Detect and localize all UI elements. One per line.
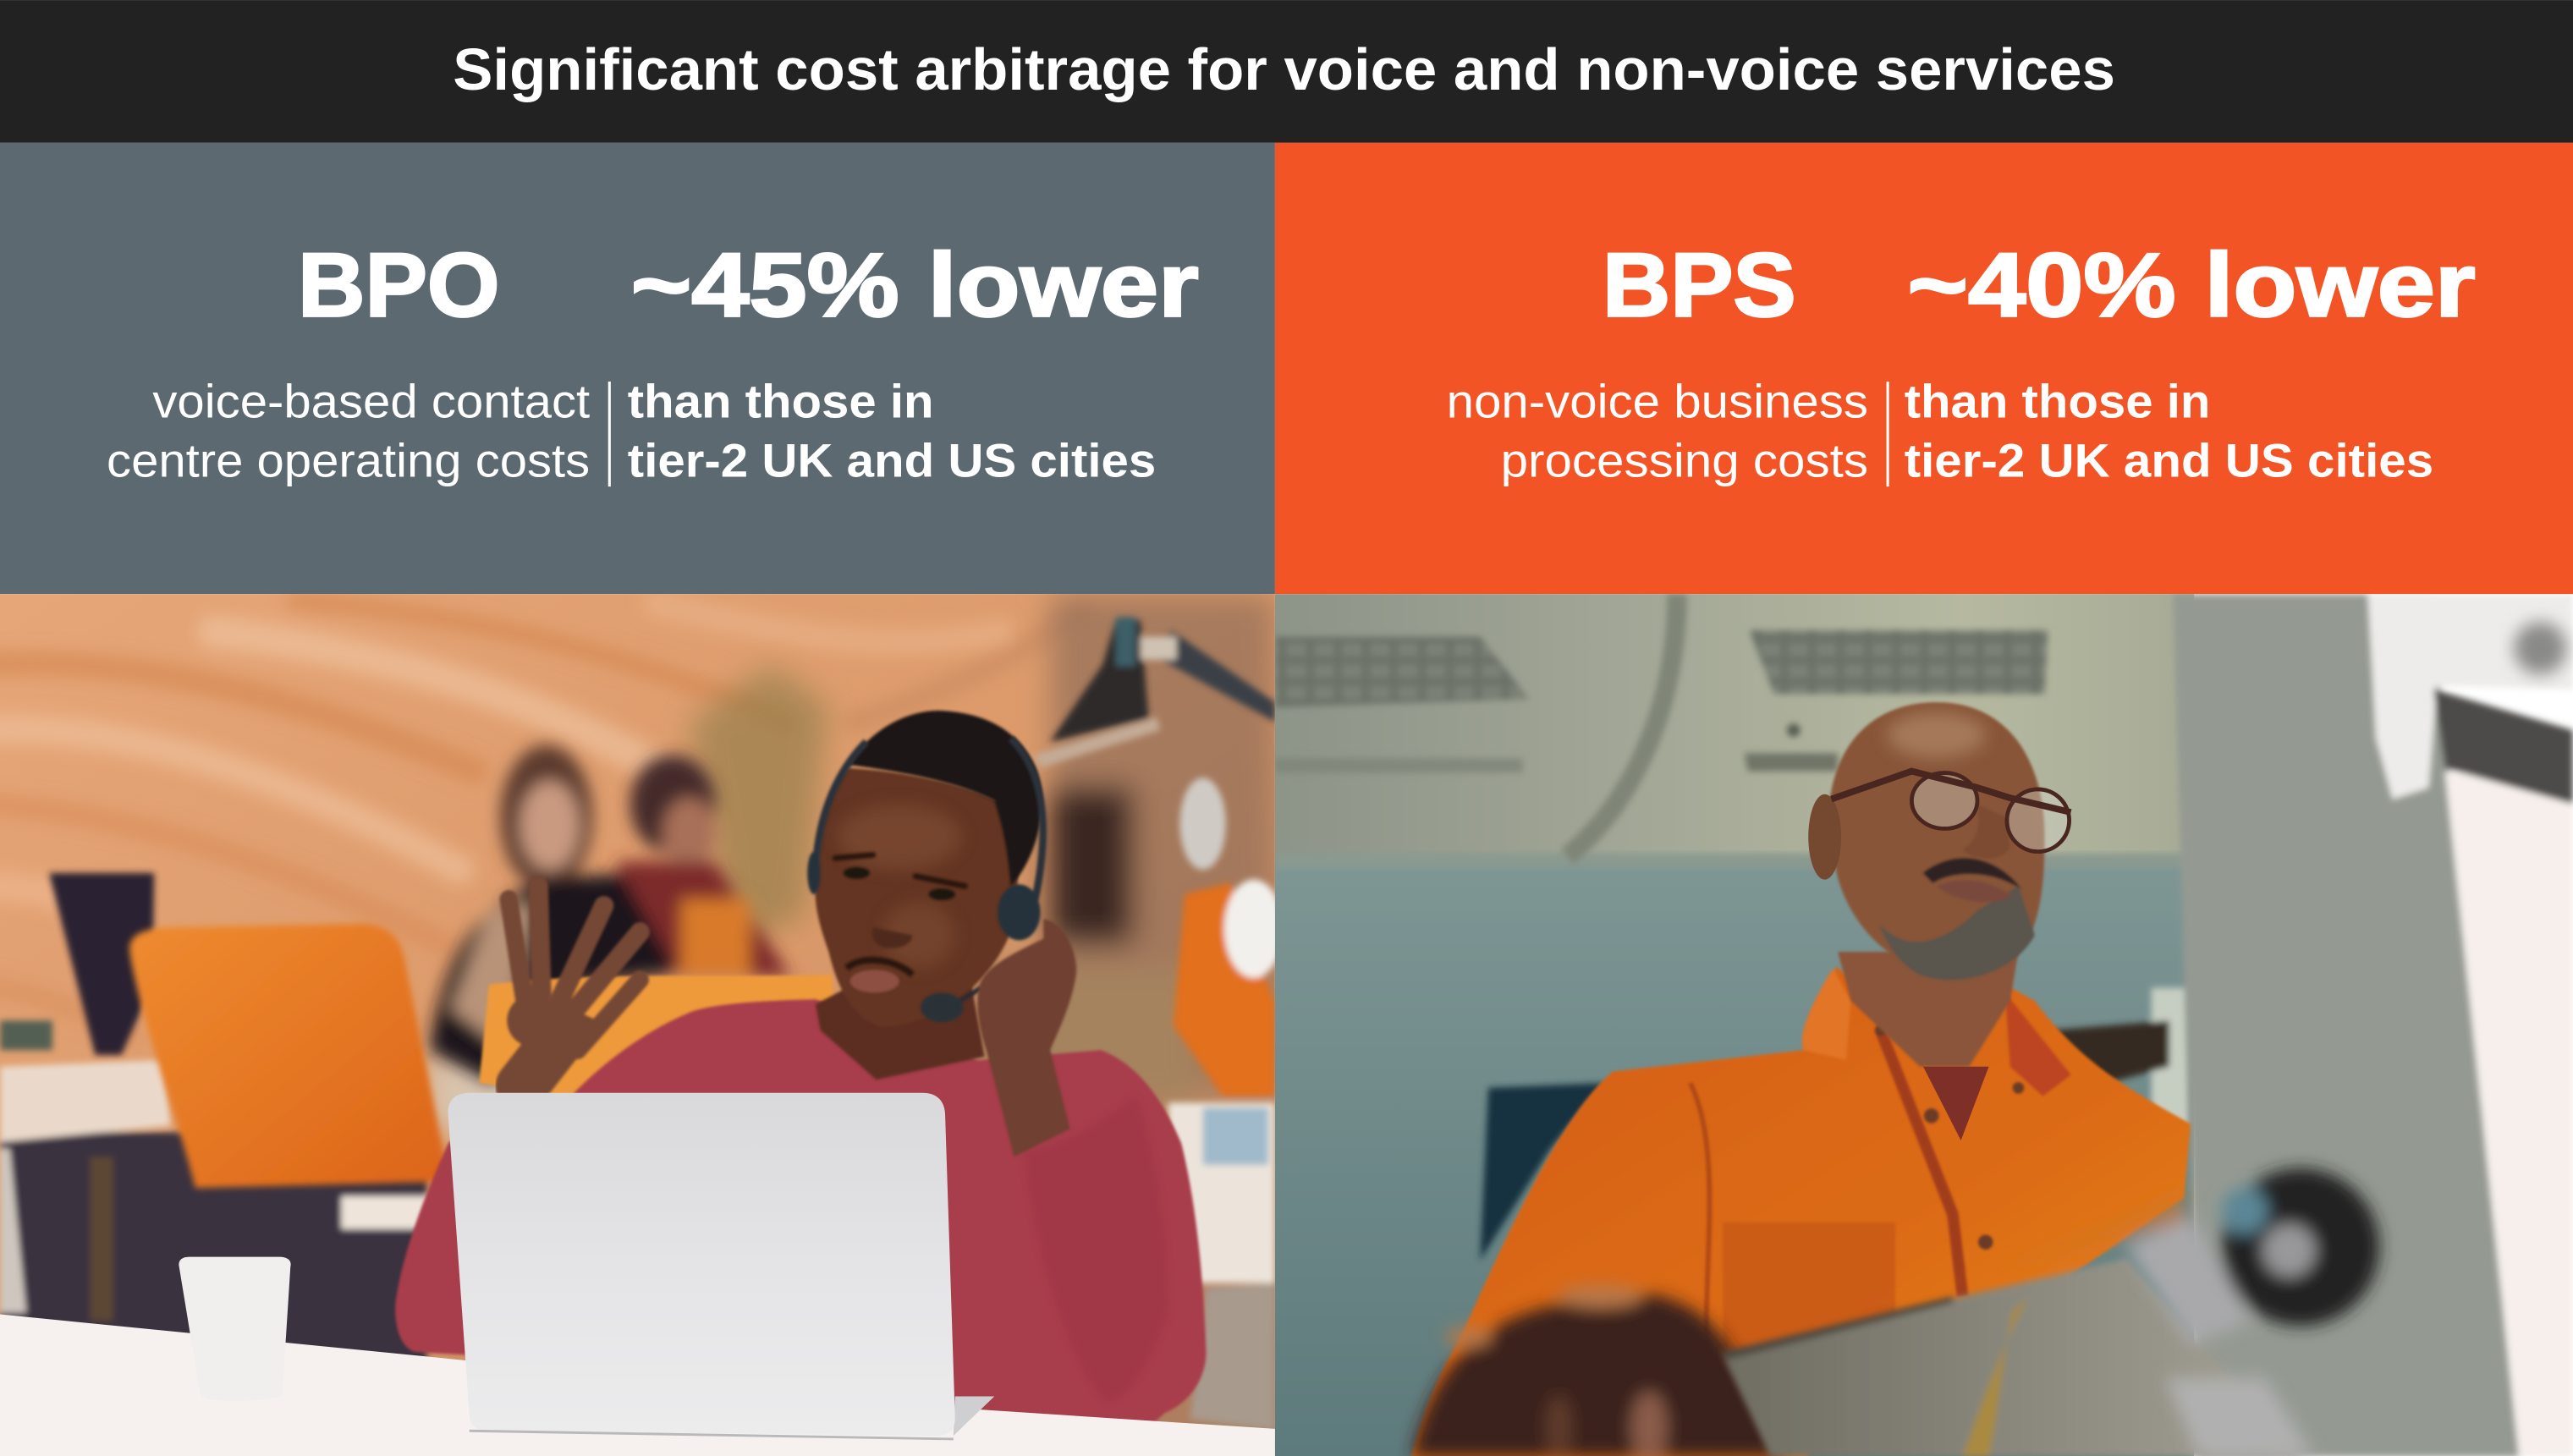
panel: BPO xyxy=(0,143,1275,594)
table xyxy=(0,1315,1280,1456)
text: BPO comparison: tier-2 UK and US cities xyxy=(628,434,1156,486)
agent hair xyxy=(849,711,1042,886)
text: non-voice description: non-voice business xyxy=(1447,376,1868,428)
title: Significant cost arbitrage for voice and non-voice services xyxy=(453,36,2115,102)
divider: BPS xyxy=(1887,382,1889,486)
text: BPO comparison xyxy=(628,376,1156,486)
agent head xyxy=(814,766,1020,992)
stat: ~40% lower: ~40% lower xyxy=(1908,234,2476,335)
foreground knob xyxy=(1838,1168,2379,1456)
text: BPS comparison: than those in xyxy=(1905,376,2210,428)
text: BPS comparison xyxy=(1905,376,2433,486)
heading: BPS: BPS xyxy=(1603,234,1796,335)
photo: smiling man with glasses at laptop xyxy=(1275,594,2573,1456)
agent raised hand xyxy=(509,886,640,1086)
back shelf objects xyxy=(2048,988,2191,1127)
background colleagues xyxy=(430,745,791,1083)
text: BPO comparison: than those in xyxy=(628,376,934,428)
back wall xyxy=(1275,861,2194,1456)
desk lamp xyxy=(1034,617,1275,870)
ceiling curved band xyxy=(1567,594,1677,856)
man shirt xyxy=(1411,966,2191,1456)
shirt shadow details xyxy=(1691,968,2071,1362)
monitor xyxy=(49,873,154,1055)
agent neck xyxy=(816,985,985,1080)
stat: ~45% lower: ~45% lower xyxy=(631,234,1199,335)
right column and white panel xyxy=(2173,594,2573,1456)
headset xyxy=(807,739,1043,1022)
divider: BPO xyxy=(608,382,611,486)
man hand xyxy=(1411,1285,1785,1456)
agent face xyxy=(835,855,965,992)
text: voice-based description xyxy=(107,376,590,486)
ceiling vents xyxy=(1275,630,2048,773)
orange chair xyxy=(129,924,449,1188)
panel: BPS xyxy=(1275,143,2573,594)
agent chair xyxy=(479,975,837,1096)
background plant xyxy=(690,665,828,943)
man beard xyxy=(1879,804,2035,980)
coffee cup xyxy=(179,1257,291,1343)
left desk and dark floor xyxy=(0,1020,440,1378)
text: voice-based description: centre operating costs xyxy=(107,434,590,486)
text: BPS comparison: tier-2 UK and US cities xyxy=(1905,434,2433,486)
text: non-voice description xyxy=(1447,376,1868,486)
right chair and desk xyxy=(1168,880,1284,1431)
laptop xyxy=(1721,1259,2301,1456)
ceiling xyxy=(1275,594,2194,865)
man head xyxy=(1828,702,2045,980)
text: voice-based description: voice-based contact xyxy=(152,376,590,428)
title bar xyxy=(0,0,2573,143)
text: non-voice description: processing costs xyxy=(1501,434,1868,486)
photo: call-centre agent with headset xyxy=(0,594,1284,1456)
laptop xyxy=(448,1093,994,1439)
agent sweater xyxy=(395,999,1206,1427)
man glasses xyxy=(1831,772,2071,852)
heading: BPO: BPO xyxy=(298,234,500,335)
man neck xyxy=(1838,952,2018,1067)
dark picture xyxy=(1480,1083,1605,1261)
agent right hand xyxy=(977,919,1076,1157)
